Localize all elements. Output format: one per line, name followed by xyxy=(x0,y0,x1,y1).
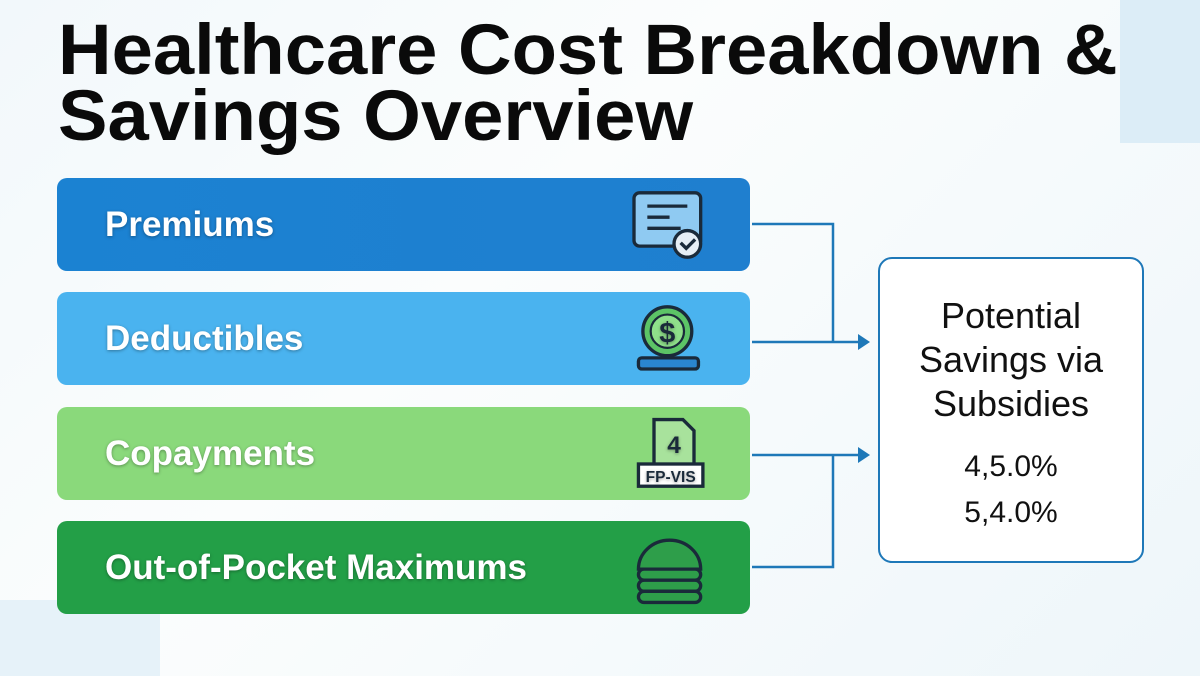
title: Healthcare Cost Breakdown & xyxy=(58,11,1118,90)
bar: deductibles: Deductibles xyxy=(105,319,303,358)
bar: premiums: Premiums xyxy=(105,205,274,244)
callout: savings: Potential xyxy=(941,295,1081,336)
bar: copayments xyxy=(57,407,750,500)
callout: savings: 4,5.0% xyxy=(964,450,1058,483)
icon: receipt: FP-VIS xyxy=(646,469,696,486)
title: Savings Overview xyxy=(58,77,693,156)
title xyxy=(58,11,1118,156)
callout: savings: 5,4.0% xyxy=(964,496,1058,529)
bar: copayments: Copayments xyxy=(105,434,315,473)
callout: savings: Savings via xyxy=(919,339,1103,380)
callout: savings: Subsidies xyxy=(933,383,1089,424)
callout: savings xyxy=(878,257,1144,563)
icon: document check xyxy=(632,191,702,259)
bar: out-of-pocket maximums: Out-of-Pocket Maximums xyxy=(105,548,527,587)
icon: receipt: 4 xyxy=(667,432,681,459)
icon: money xyxy=(636,305,700,371)
icon: stack xyxy=(636,538,702,604)
bar: deductibles xyxy=(57,292,750,385)
bar: out-of-pocket maximums xyxy=(57,521,750,614)
icon: receipt xyxy=(636,418,705,488)
icon: money: $ xyxy=(659,317,675,349)
bar: premiums xyxy=(57,178,750,271)
